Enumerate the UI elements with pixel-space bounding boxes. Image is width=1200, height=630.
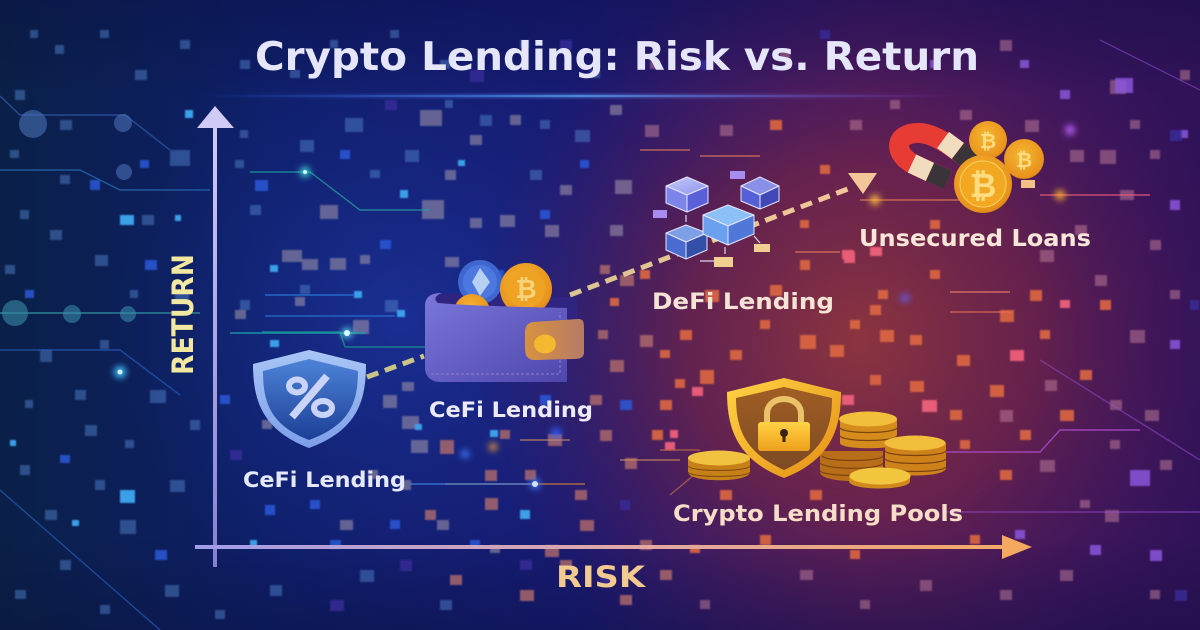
horizontal axis: risk (195, 535, 1032, 559)
label: crypto lending pools: Crypto Lending Pools (673, 502, 963, 527)
horizontal title underline (200, 95, 960, 97)
label: unsecured loans: Unsecured Loans (859, 226, 1091, 252)
axis label: risk: RISK (556, 560, 647, 594)
icon: blue percent shield (253, 350, 366, 448)
label: defi lending: DeFi Lending (652, 290, 834, 315)
axis label: return: RETURN (166, 254, 200, 375)
icon: magnet with bitcoins (899, 121, 1044, 213)
title: Crypto Lending: Risk vs. Return (255, 35, 979, 80)
icon: padlock (758, 399, 810, 451)
icon: magnet with bitcoins: ₿ (970, 166, 996, 205)
dashed trend line with arrow (367, 173, 877, 377)
coin stack: front (849, 468, 910, 488)
label: cefi lending (shield): CeFi Lending (243, 468, 406, 492)
icon: wallet with coins: ₿ (515, 275, 537, 305)
vertical axis: return (197, 106, 234, 567)
label: cefi lending (wallet): CeFi Lending (429, 398, 593, 422)
icon: wallet with coins (425, 260, 584, 382)
coin stack: left (688, 450, 750, 480)
glowing nodes (2, 110, 1075, 489)
icon: blockchain cubes (653, 171, 779, 267)
icon: coin stacks and gold lock shield (688, 378, 946, 488)
coin stack: right (884, 436, 946, 476)
icon: magnet with bitcoins: ₿ (1016, 148, 1032, 172)
coin stack: back (820, 412, 897, 481)
shield: gold (727, 378, 841, 478)
icon: magnet with bitcoins: ₿ (980, 129, 996, 153)
